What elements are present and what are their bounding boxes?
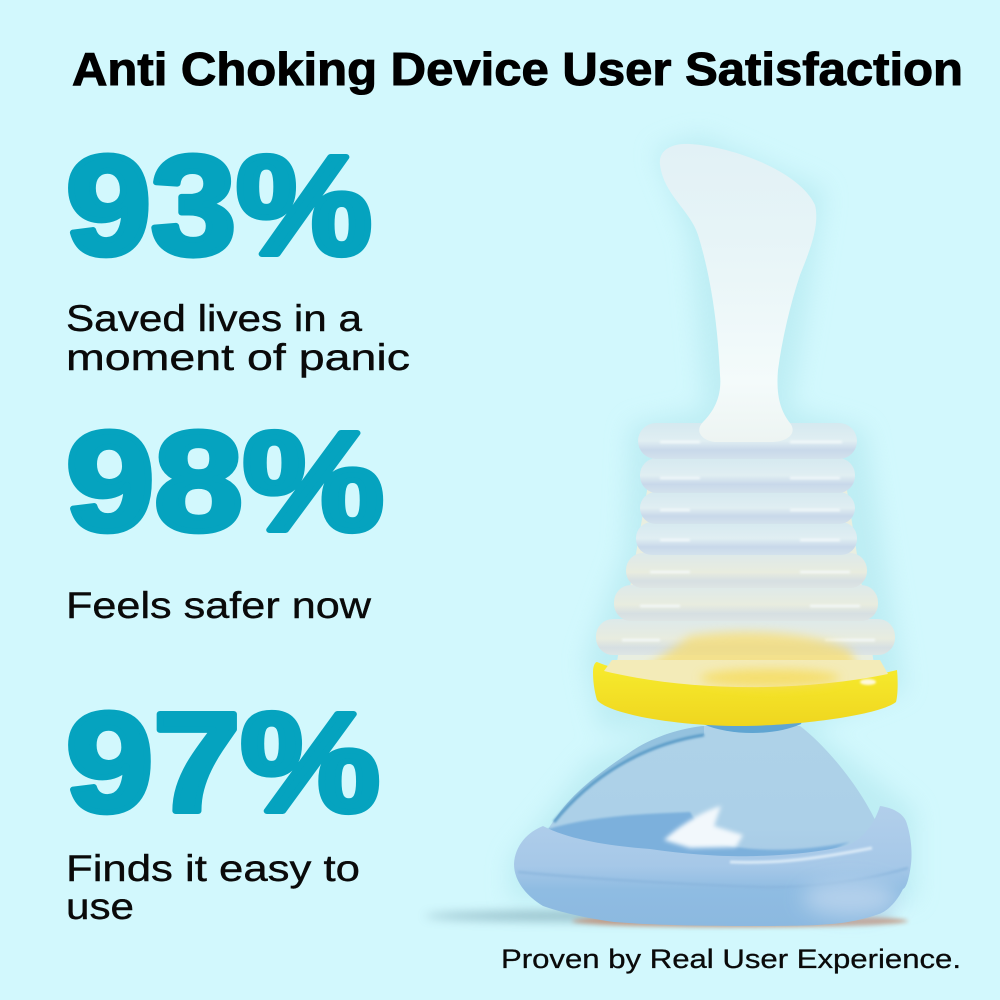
number: 93%: 93% [66,126,372,284]
number: 97%: 97% [66,683,380,841]
yellow collar [593,660,898,726]
yellow insert glow [640,632,860,672]
stat: 93% saved lives [66,126,410,378]
number: 98%: 98% [66,402,384,560]
bellows rings [596,423,895,672]
title: Anti Choking Device User Satisfaction [72,43,963,95]
text: easy to use [66,848,360,927]
handle [660,144,816,442]
text: easy to use: Finds it easy to [66,848,360,889]
device illustration [425,135,915,927]
stat: 97% easy to use [66,683,380,927]
ground shadow [425,910,908,927]
blue base flange [514,806,912,926]
dome highlight [664,806,743,848]
text: saved lives [66,298,410,378]
text: saved lives: Saved lives in a [66,298,362,339]
footer caption: Proven by Real User Experience. [501,944,961,974]
text: feels safer: Feels safer now [66,585,371,626]
device glow [510,135,915,900]
text: easy to use: use [66,886,134,927]
text: saved lives: moment of panic [66,337,410,378]
blue base dome [545,718,884,865]
stat: 98% feels safer [66,402,384,626]
silicone bellows core [612,445,878,690]
ring highlights [622,442,875,640]
